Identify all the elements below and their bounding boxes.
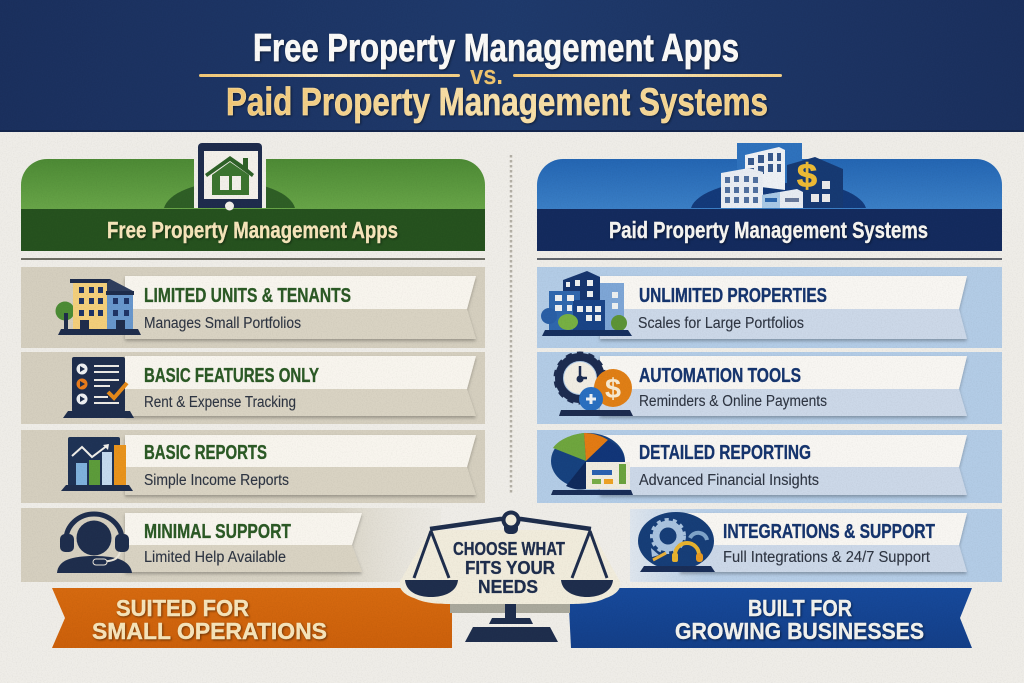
- banner: growing businesses: [568, 588, 972, 648]
- panel: automation tools: [537, 352, 1002, 424]
- panel: automation tools: Reminders & Online Payments: [639, 393, 827, 410]
- icon: city block: [541, 271, 632, 336]
- text: integrations and support: INTEGRATIONS & SUPPORT: [723, 521, 935, 543]
- panel: limited units: [21, 267, 485, 348]
- scale label: CHOOSE WHAT: [453, 538, 566, 559]
- panel: free header: [21, 143, 485, 251]
- icon: city and dollar: $: [797, 157, 817, 194]
- panel: unlimited properties: [537, 267, 1002, 348]
- panel: integrations and support: [630, 509, 1002, 582]
- rule right: [537, 258, 1002, 260]
- panel: unlimited properties: Scales for Large Portfolios: [638, 315, 804, 332]
- text: minimal support: MINIMAL SUPPORT: [144, 521, 291, 543]
- banner: small operations: SMALL OPERATIONS: [92, 618, 327, 644]
- banner: growing businesses: BUILT FOR: [748, 595, 852, 621]
- title: versus rule: vs.: [470, 60, 503, 90]
- panel: basic features: [21, 352, 485, 424]
- icon: checklist: [63, 357, 134, 418]
- icon: clock gear and coin: $: [605, 373, 621, 404]
- banner: growing businesses: GROWING BUSINESSES: [675, 618, 924, 644]
- panel: detailed reporting: [537, 430, 1002, 503]
- panel: limited units: Manages Small Portfolios: [144, 315, 301, 332]
- text: unlimited properties: UNLIMITED PROPERTIES: [639, 285, 827, 307]
- title: free apps: Free Property Management Apps: [253, 27, 739, 70]
- icon: gears and headset: [638, 512, 715, 572]
- heading: free apps: Free Property Management Apps: [107, 217, 398, 243]
- panel: detailed reporting: Advanced Financial Insights: [639, 472, 819, 489]
- text: basic features: BASIC FEATURES ONLY: [144, 365, 319, 387]
- scale callout: NEEDS: [478, 576, 538, 597]
- panel: integrations and support: Full Integrations & 24/7 Support: [723, 549, 931, 566]
- icon: city and dollar: [691, 143, 866, 208]
- icon: headset agent: [57, 514, 132, 573]
- icon: tablet with house: [164, 143, 295, 210]
- banner: small operations: SUITED FOR: [116, 595, 249, 621]
- title banner: [0, 0, 1024, 132]
- icon: pie chart and document: [551, 433, 633, 495]
- panel: basic reports: [21, 430, 485, 503]
- icon: bar chart: [61, 437, 133, 491]
- rule left: [21, 258, 485, 260]
- center dotted divider: [510, 155, 512, 495]
- text: automation tools: AUTOMATION TOOLS: [639, 365, 801, 387]
- panel: basic features: Rent & Expense Tracking: [144, 394, 296, 411]
- panel: basic reports: Simple Income Reports: [144, 472, 289, 489]
- text: limited units: LIMITED UNITS & TENANTS: [144, 285, 351, 307]
- scale callout: FITS YOUR: [465, 557, 555, 578]
- panel: minimal support: [21, 508, 441, 582]
- title: paid systems: Paid Property Management Systems: [226, 81, 768, 124]
- panel: paid header: [537, 143, 1002, 251]
- scale callout: [400, 510, 620, 642]
- icon: clock gear and coin: [556, 354, 633, 416]
- title: versus rule: [199, 60, 782, 90]
- panel: minimal support: Limited Help Available: [144, 549, 286, 566]
- text: detailed reporting: DETAILED REPORTING: [639, 442, 811, 464]
- icon: apartment building: [56, 279, 141, 335]
- heading: paid systems: Paid Property Management Systems: [609, 217, 928, 243]
- banner: small operations: [52, 588, 452, 648]
- text: basic reports: BASIC REPORTS: [144, 442, 267, 464]
